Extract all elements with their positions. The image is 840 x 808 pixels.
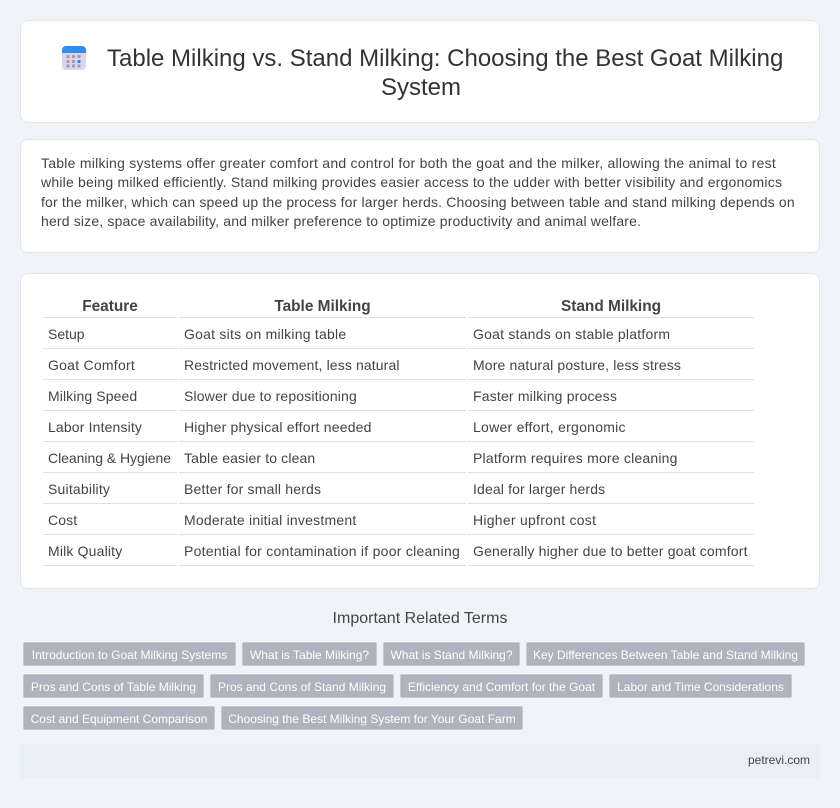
comparison table xyxy=(43,298,754,566)
icon: calendar xyxy=(62,46,86,70)
comparison table: Milking Speed xyxy=(48,388,137,404)
comparison table: Ideal for larger herds xyxy=(473,481,605,497)
related term tags: Choosing the Best Milking System for Your Goat Farm xyxy=(228,712,516,726)
comparison table: Setup xyxy=(48,326,85,342)
comparison table: Higher upfront cost xyxy=(473,512,596,528)
intro text xyxy=(41,155,795,229)
comparison table: Cleaning & Hygiene xyxy=(48,450,171,466)
comparison table: Generally higher due to better goat comfort xyxy=(473,543,748,559)
title xyxy=(107,45,783,101)
header panel xyxy=(20,20,820,123)
comparison table: Lower effort, ergonomic xyxy=(473,419,626,435)
comparison table: Platform requires more cleaning xyxy=(473,450,678,466)
intro panel xyxy=(20,139,820,253)
related term tags: Key Differences Between Table and Stand Milking xyxy=(533,648,798,662)
related term tags xyxy=(23,642,805,730)
comparison table panel xyxy=(20,273,820,589)
comparison table: Goat Comfort xyxy=(48,357,135,373)
footer source text: petrevi.com xyxy=(748,753,810,767)
title: System xyxy=(381,74,461,101)
comparison table: Goat stands on stable platform xyxy=(473,326,670,342)
comparison table: Slower due to repositioning xyxy=(184,388,357,404)
related terms heading: Important Related Terms xyxy=(333,610,507,627)
related term tags: Pros and Cons of Stand Milking xyxy=(218,680,386,694)
related term tags: What is Table Milking? xyxy=(250,648,369,662)
comparison table: Potential for contamination if poor cleaning xyxy=(184,543,460,559)
comparison table: Labor Intensity xyxy=(48,419,142,435)
comparison table: Better for small herds xyxy=(184,481,321,497)
intro text: while being milked efficiently. Stand milking provides easier access to the udder with better visibility and ergonomics xyxy=(41,174,782,190)
comparison table: Table easier to clean xyxy=(184,450,315,466)
comparison table: Restricted movement, less natural xyxy=(184,357,400,373)
related term tags: Cost and Equipment Comparison xyxy=(31,712,207,726)
comparison table: Cost xyxy=(48,512,77,528)
title: Table Milking vs. Stand Milking: Choosing the Best Goat Milking xyxy=(107,45,783,72)
related term tags: Efficiency and Comfort for the Goat xyxy=(408,680,595,694)
comparison table: Higher physical effort needed xyxy=(184,419,372,435)
related term tags: Pros and Cons of Table Milking xyxy=(31,680,196,694)
comparison table: Milk Quality xyxy=(48,543,122,559)
intro text: for the milker, which can speed up the process for larger herds. Choosing between table and stand milking depends on xyxy=(41,194,795,210)
intro text: Table milking systems offer greater comfort and control for both the goat and the milker, allowing the animal to rest xyxy=(41,155,776,171)
comparison table: Goat sits on milking table xyxy=(184,326,346,342)
comparison table: Suitability xyxy=(48,481,110,497)
comparison table: Stand Milking xyxy=(561,298,661,315)
intro text: herd size, space availability, and milker preference to optimize productivity and animal welfare. xyxy=(41,213,641,229)
related term tags: What is Stand Milking? xyxy=(390,648,513,662)
related term tags: Introduction to Goat Milking Systems xyxy=(32,648,227,662)
footer bar xyxy=(20,744,820,778)
comparison table: Faster milking process xyxy=(473,388,617,404)
comparison table: Feature xyxy=(82,298,138,315)
comparison table: Moderate initial investment xyxy=(184,512,356,528)
related term tags: Labor and Time Considerations xyxy=(617,680,784,694)
comparison table: Table Milking xyxy=(274,298,371,315)
comparison table: More natural posture, less stress xyxy=(473,357,681,373)
